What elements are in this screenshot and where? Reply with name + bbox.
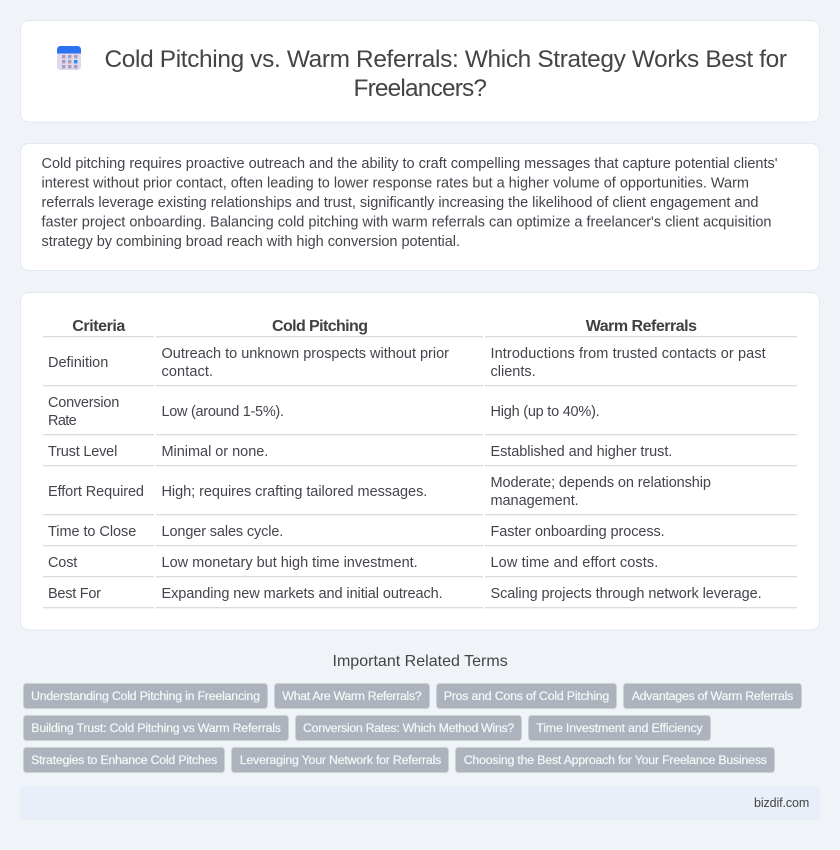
- row: time to close: Longer sales cycle.: [162, 524, 283, 540]
- row: conversion rate: High (up to 40%).: [490, 404, 600, 420]
- table header row: [72, 318, 697, 335]
- table header row: Criteria: [72, 318, 125, 335]
- icon: calendar: [57, 46, 81, 70]
- chip: [456, 748, 774, 772]
- chip: [624, 684, 802, 708]
- chip: [24, 748, 224, 772]
- row: trust level: Minimal or none.: [162, 444, 268, 460]
- chip: Pros and Cons of Cold Pitching: [444, 689, 609, 703]
- footer site name: bizdif.com: [754, 796, 809, 810]
- row: trust level: Trust Level: [48, 444, 117, 460]
- row: time to close: Time to Close: [48, 524, 136, 540]
- intro text block: Cold pitching requires proactive outreach and the ability to craft compelling messages that capture potential clients': [42, 156, 778, 172]
- intro text block: interest without prior contact, often leading to lower response rates but a higher volume of opportunities. Warm: [42, 176, 749, 192]
- row: effort required: High; requires crafting tailored messages.: [162, 484, 427, 500]
- row: definition: Definition: [48, 355, 108, 371]
- row: effort required: Effort Required: [48, 484, 144, 500]
- chip: [24, 716, 288, 740]
- row: conversion rate: Low (around 1-5%).: [162, 404, 284, 420]
- panel: comparison table: [20, 292, 820, 630]
- chip: [24, 684, 268, 708]
- row: best for: Expanding new markets and initial outreach.: [162, 586, 443, 602]
- row: time to close: Faster onboarding process.: [490, 524, 665, 540]
- row: effort required: Moderate; depends on relationship: [490, 475, 711, 491]
- footer bar: [20, 786, 820, 820]
- row: definition: Outreach to unknown prospects without prior: [162, 346, 449, 362]
- row: cost: Cost: [48, 555, 77, 571]
- chip: What Are Warm Referrals?: [282, 689, 422, 703]
- chip: Advantages of Warm Referrals: [632, 689, 793, 703]
- chip: [528, 716, 710, 740]
- row: cost: [48, 555, 658, 571]
- row: cost: Low time and effort costs.: [490, 555, 658, 571]
- row: best for: Best For: [48, 586, 101, 602]
- table header row: Cold Pitching: [272, 318, 368, 335]
- chip: Time Investment and Efficiency: [536, 721, 703, 735]
- row: best for: Scaling projects through network leverage.: [490, 586, 762, 602]
- intro text block: referrals leverage existing relationships and trust, significantly increasing the likelihood of client engagement and: [42, 195, 758, 211]
- panel: related term chips: [24, 684, 802, 772]
- panel: intro paragraph: [20, 144, 820, 270]
- chip: Choosing the Best Approach for Your Freelance Business: [464, 753, 767, 767]
- row: effort required: [48, 475, 711, 509]
- chip: [296, 716, 522, 740]
- chip: [232, 748, 448, 772]
- panel: header: [20, 20, 820, 122]
- row: conversion rate: Conversion: [48, 395, 119, 411]
- table header row: Warm Referrals: [586, 318, 697, 335]
- chip: [436, 684, 616, 708]
- title: [104, 46, 787, 102]
- title: Freelancers?: [354, 75, 487, 102]
- chip: [274, 684, 430, 708]
- row: definition: clients.: [490, 364, 536, 380]
- row: trust level: Established and higher trust.: [490, 444, 672, 460]
- chip: Understanding Cold Pitching in Freelancing: [31, 689, 260, 703]
- chip: Conversion Rates: Which Method Wins?: [303, 721, 514, 735]
- row: conversion rate: [48, 395, 600, 429]
- chip: Leveraging Your Network for Referrals: [240, 753, 441, 767]
- row: effort required: management.: [490, 493, 579, 509]
- title: Cold Pitching vs. Warm Referrals: Which Strategy Works Best for: [104, 46, 787, 73]
- row: conversion rate: Rate: [48, 413, 77, 429]
- intro text block: [42, 156, 778, 250]
- row: cost: Low monetary but high time investment.: [162, 555, 418, 571]
- row: definition: [48, 346, 766, 380]
- row: definition: Introductions from trusted contacts or past: [490, 346, 766, 362]
- heading: related terms: Important Related Terms: [332, 653, 508, 670]
- chip: Strategies to Enhance Cold Pitches: [31, 753, 217, 767]
- intro text block: faster project onboarding. Balancing cold pitching with warm referrals can optimize a freelancer's client acquisition: [42, 214, 772, 230]
- row: trust level: [48, 444, 672, 460]
- chip: Building Trust: Cold Pitching vs Warm Referrals: [31, 721, 281, 735]
- row: time to close: [48, 524, 665, 540]
- row: best for: [48, 586, 762, 602]
- intro text block: strategy by combining broad reach with high conversion potential.: [42, 234, 460, 250]
- row: definition: contact.: [162, 364, 213, 380]
